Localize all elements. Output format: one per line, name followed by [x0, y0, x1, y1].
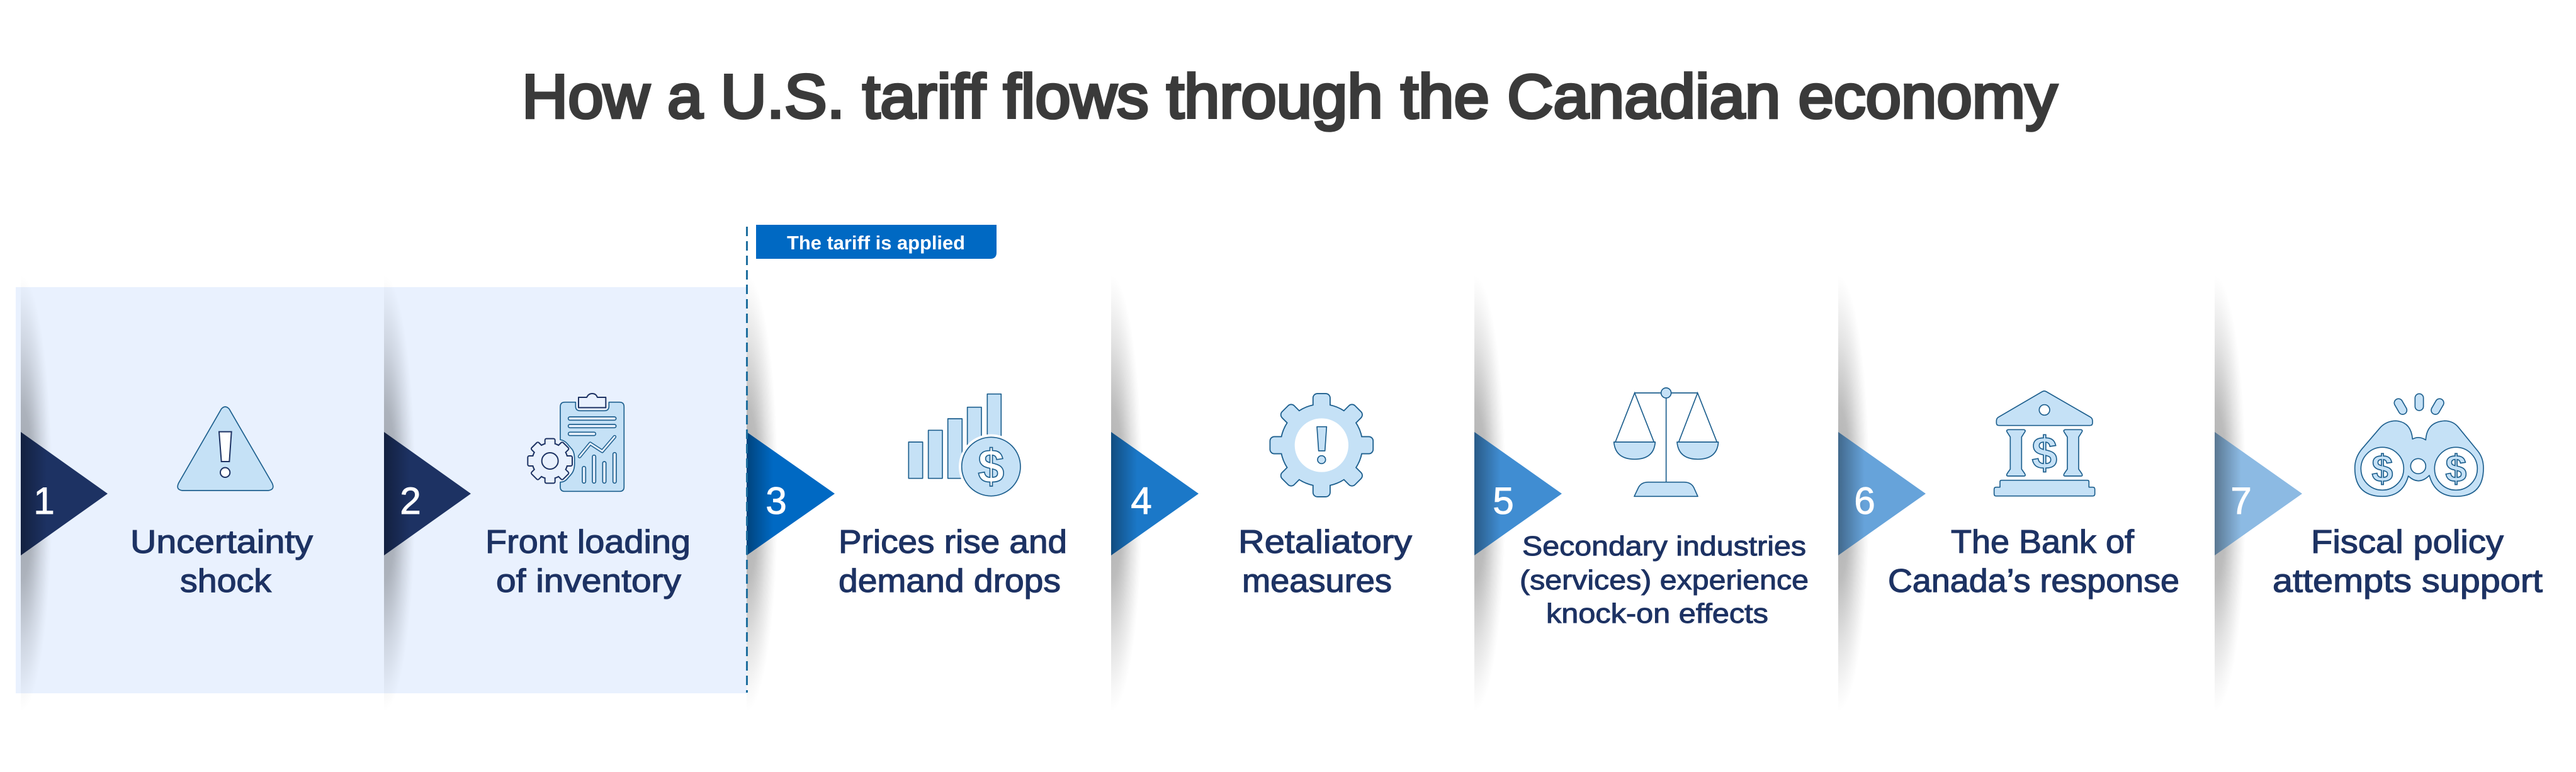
icon: warning triangle — [178, 407, 273, 491]
arrow 7: 7 — [2230, 480, 2252, 522]
label 3: demand drops — [839, 563, 1061, 599]
label 7: Fiscal policy — [2311, 524, 2504, 560]
label 6: Canada’s response — [1888, 563, 2179, 599]
icon: gear with exclamation — [1270, 394, 1372, 496]
step 7: fiscal policy — [2215, 275, 2543, 712]
title: How a U.S. tariff flows through the Canadian economy — [522, 62, 2057, 131]
label 7 — [2273, 524, 2543, 599]
panel: pre-tariff background — [16, 287, 747, 693]
arrow 4 — [1111, 432, 1199, 555]
label 4: measures — [1242, 563, 1392, 599]
dashed tariff divider — [746, 227, 748, 693]
arrow 6 — [1838, 432, 1926, 555]
label 4 — [1238, 524, 1412, 599]
label 3 — [839, 524, 1067, 599]
arrow 5 — [1474, 432, 1562, 555]
icon: rising bars and dollar coin: $ — [978, 440, 1004, 493]
label 6 — [1888, 524, 2179, 599]
arrow 7 — [2215, 432, 2302, 555]
label 3: Prices rise and — [839, 524, 1067, 560]
arrow 3: 3 — [765, 480, 787, 522]
callout: the tariff is applied — [756, 225, 997, 259]
label 7: attempts support — [2273, 563, 2543, 599]
label 1 — [130, 524, 313, 599]
icon: balance scales — [1614, 388, 1719, 496]
step 3: prices rise — [747, 275, 1067, 712]
icon: binoculars with dollars: $ — [2371, 447, 2393, 490]
label 2 — [485, 524, 691, 599]
icon: clipboard and gear — [528, 394, 624, 491]
icon: bank building — [1994, 391, 2095, 496]
arrow 1 — [21, 432, 108, 555]
label 6: The Bank of — [1951, 524, 2135, 560]
label 5 — [1520, 531, 1809, 629]
label 2: of inventory — [496, 563, 681, 599]
label 5: Secondary industries — [1522, 531, 1806, 562]
icon: binoculars with dollars: $ — [2445, 447, 2466, 490]
label 2: Front loading — [485, 524, 691, 560]
step 5: secondary industries — [1474, 275, 1809, 712]
label 5: (services) experience — [1520, 565, 1809, 596]
callout: the tariff is applied: The tariff is applied — [787, 232, 965, 254]
arrow 1: 1 — [33, 480, 55, 522]
arrow 2: 2 — [400, 480, 421, 522]
step 6: Bank of Canada — [1838, 275, 2179, 712]
label 1: shock — [180, 563, 272, 599]
step 1: uncertainty shock — [21, 275, 313, 712]
arrow 5: 5 — [1493, 480, 1514, 522]
step 2: front loading — [384, 275, 691, 712]
arrow 6: 6 — [1854, 480, 1875, 522]
label 5: knock-on effects — [1546, 598, 1768, 629]
arrow 4: 4 — [1131, 480, 1152, 522]
arrow 2 — [384, 432, 471, 555]
step 4: retaliatory measures — [1111, 275, 1412, 712]
icon: binoculars with dollars — [2355, 394, 2483, 496]
label 4: Retaliatory — [1238, 524, 1412, 560]
icon: rising bars and dollar coin — [908, 394, 1024, 499]
label 1: Uncertainty — [130, 524, 313, 560]
arrow 3 — [747, 432, 835, 555]
icon: bank building: $ — [2031, 428, 2057, 479]
